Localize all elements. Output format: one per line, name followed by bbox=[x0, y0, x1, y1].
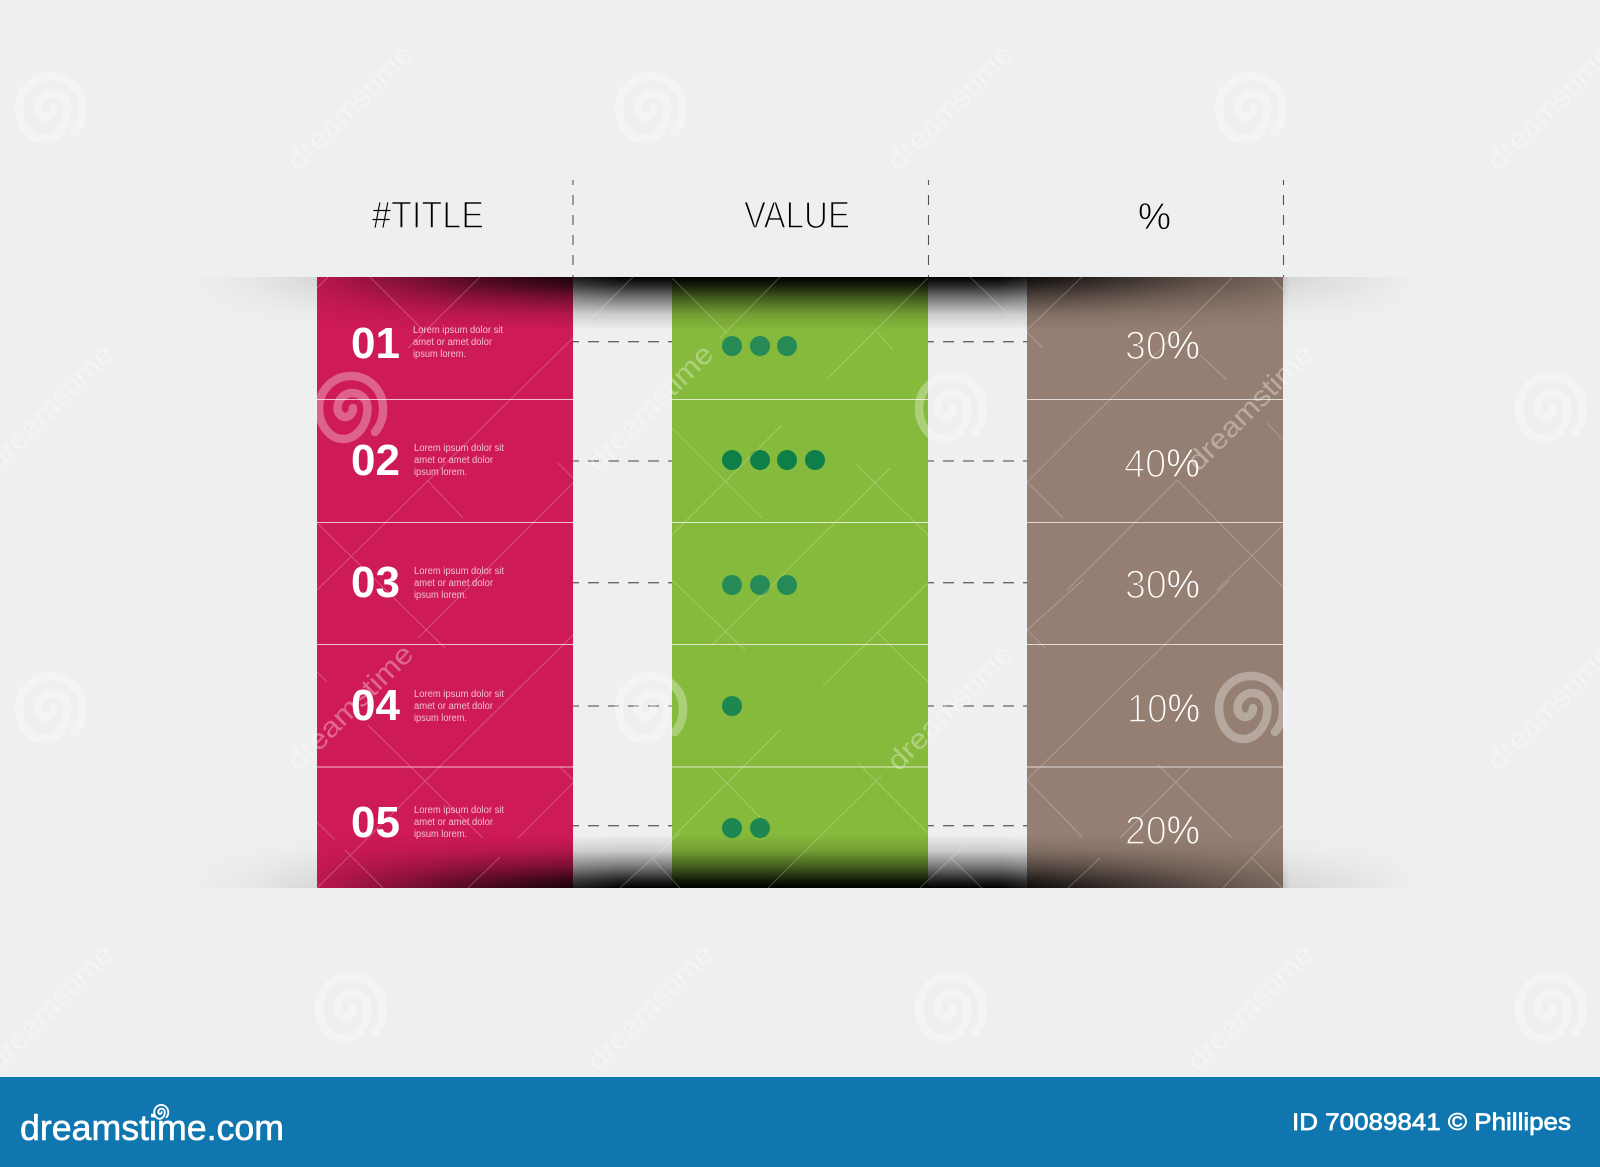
column headings bbox=[372, 195, 1171, 238]
footer bar bbox=[0, 1077, 1600, 1167]
row labels: title column bbox=[351, 319, 504, 847]
text: dreamstime bbox=[281, 638, 419, 777]
top shadow bbox=[253, 277, 1374, 326]
row 02: amet or amet dolor bbox=[414, 455, 494, 466]
row 03 bbox=[351, 558, 504, 607]
text: dreamstime bbox=[1181, 338, 1319, 477]
row 04: 04 bbox=[351, 681, 400, 730]
row 04 bbox=[351, 681, 504, 730]
row 05 bbox=[351, 798, 504, 847]
panel: value column bbox=[672, 277, 928, 888]
row 01: ipsum lorem. bbox=[413, 349, 466, 360]
value 10%: 10% bbox=[1127, 687, 1200, 731]
heading: #TITLE: #TITLE bbox=[372, 195, 484, 237]
heading: percent: % bbox=[1138, 196, 1171, 238]
row 01 bbox=[351, 319, 503, 368]
text: dreamstime bbox=[581, 338, 719, 477]
row 04: ipsum lorem. bbox=[414, 713, 467, 724]
row 05: ipsum lorem. bbox=[414, 829, 467, 840]
row 02 bbox=[351, 436, 504, 485]
row 01: amet or amet dolor bbox=[413, 337, 493, 348]
dot values bbox=[722, 336, 825, 838]
value 30%: 30% bbox=[1125, 324, 1200, 368]
row 05: 05 bbox=[351, 798, 400, 847]
text: dreamstime bbox=[281, 38, 419, 177]
value 30%: 30% bbox=[1125, 563, 1200, 607]
value 40%: 40% bbox=[1124, 442, 1200, 486]
value 20%: 20% bbox=[1125, 809, 1200, 853]
row 02: Lorem ipsum dolor sit bbox=[414, 443, 504, 454]
row 01: Lorem ipsum dolor sit bbox=[413, 325, 503, 336]
row 04: Lorem ipsum dolor sit bbox=[414, 689, 504, 700]
row 01: 01 bbox=[351, 319, 400, 368]
heading: VALUE: VALUE bbox=[744, 195, 850, 237]
row 02: 02 bbox=[351, 436, 400, 485]
dots row 1: three bbox=[722, 336, 797, 356]
bottom shadow bbox=[253, 838, 1374, 888]
text: dreamstime bbox=[881, 638, 1019, 777]
footer credit: ID 70089841 © Phillipes bbox=[1292, 1109, 1571, 1136]
row 05: amet or amet dolor bbox=[414, 817, 494, 828]
row 03: Lorem ipsum dolor sit bbox=[414, 566, 504, 577]
dots row 2: four bbox=[722, 450, 825, 470]
text: dreamstime bbox=[881, 38, 1019, 177]
dots row 5: two bbox=[722, 818, 770, 838]
text: dreamstime bbox=[1181, 938, 1319, 1077]
row 03: ipsum lorem. bbox=[414, 590, 467, 601]
text: dreamstime bbox=[581, 938, 719, 1077]
row 03: amet or amet dolor bbox=[414, 578, 494, 589]
row 02: ipsum lorem. bbox=[414, 467, 467, 478]
percent values bbox=[1124, 324, 1200, 853]
dots row 3: three bbox=[722, 575, 797, 595]
row 05: Lorem ipsum dolor sit bbox=[414, 805, 504, 816]
footer logo: dreamstime.com bbox=[20, 1107, 284, 1148]
dots row 4: one bbox=[722, 696, 742, 716]
row 03: 03 bbox=[351, 558, 400, 607]
panel: title column bbox=[317, 277, 573, 888]
panel: percent column bbox=[1027, 277, 1283, 888]
row 04: amet or amet dolor bbox=[414, 701, 494, 712]
